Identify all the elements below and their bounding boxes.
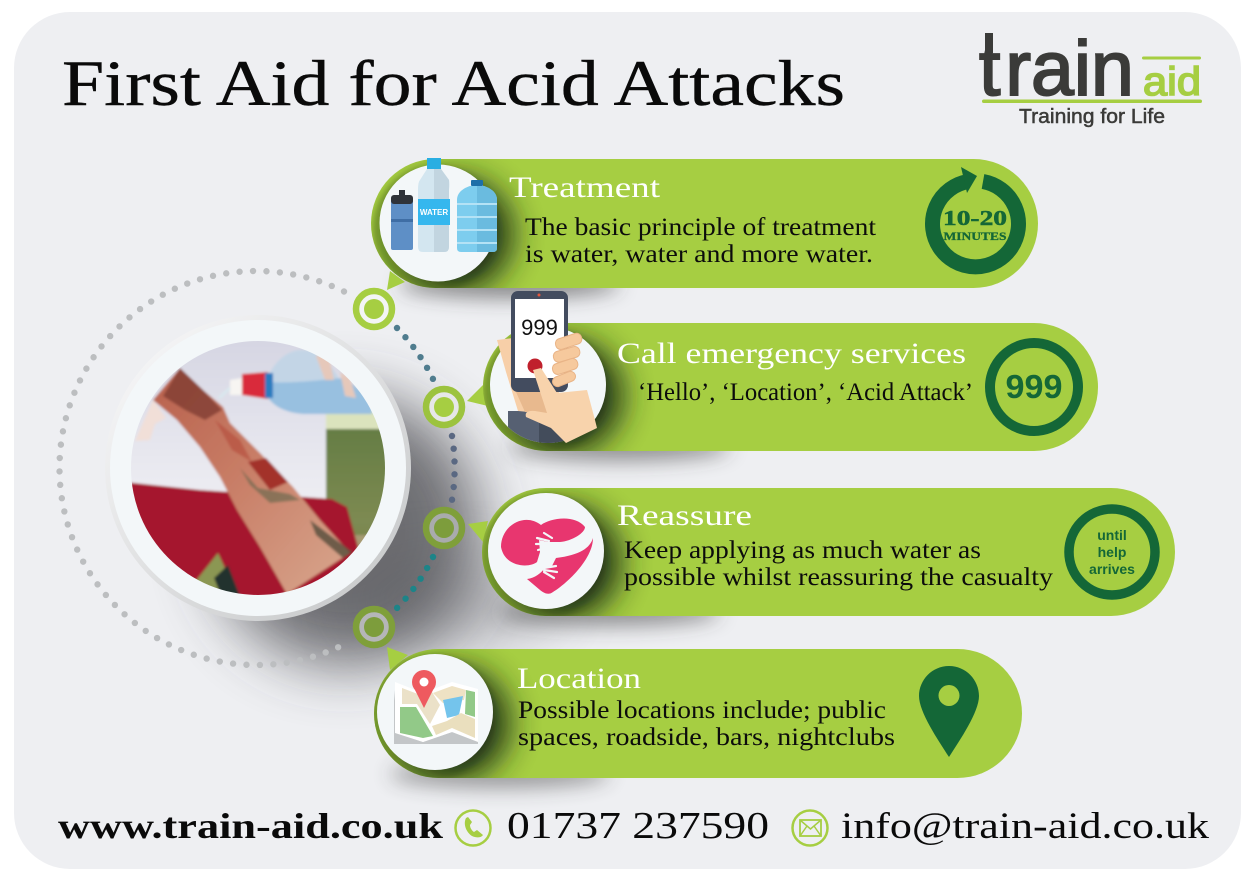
icon: hand holding phone dialling 999 xyxy=(497,291,597,445)
panel: call emergency services: ‘Hello’, ‘Location’, ‘Acid Attack’ xyxy=(638,379,973,406)
logo: train aid xyxy=(979,26,1202,128)
logo: train aid: Training for Life xyxy=(1019,106,1165,128)
footer: email: info@train-aid.co.uk xyxy=(841,806,1210,847)
dotted arc: grey xyxy=(59,271,344,665)
panel: reassure: Keep applying as much water as xyxy=(624,537,981,564)
panel: call emergency services: Call emergency services xyxy=(617,337,966,370)
icon: heart with hugging arms xyxy=(501,518,593,594)
panel: treatment xyxy=(371,158,1038,298)
icon: hand holding phone dialling 999: 999 xyxy=(521,315,558,340)
badge: until help arrives: until xyxy=(1097,527,1127,543)
panel: location: Location xyxy=(517,662,641,695)
panel: treatment: is water, water and more water. xyxy=(525,241,873,268)
node rings xyxy=(356,291,462,645)
dotted arc: teal xyxy=(397,557,433,608)
icon: email xyxy=(792,810,828,846)
footer: website: www.train-aid.co.uk xyxy=(58,806,443,846)
panel: location: Possible locations include; public xyxy=(518,697,886,724)
dotted arc: blue xyxy=(397,328,433,379)
badge: 10-20 minutes: MINUTES xyxy=(944,229,1007,243)
photo: arm being rinsed with water xyxy=(131,341,385,595)
badge: until help arrives: help xyxy=(1098,544,1126,560)
panel: reassure: possible whilst reassuring the casualty xyxy=(624,564,1054,591)
central circle shadow xyxy=(210,395,565,665)
panel: location: spaces, roadside, bars, nightclubs xyxy=(518,724,895,751)
panel: call emergency services xyxy=(467,291,1098,461)
badge: 10-20 minutes: 10-20 xyxy=(943,206,1007,230)
icon: water bottles xyxy=(391,158,497,252)
icon: location pin xyxy=(919,666,979,757)
badge: 999 xyxy=(990,343,1078,431)
central photo disc xyxy=(105,315,411,621)
badge: until help arrives: arrives xyxy=(1089,561,1135,577)
panel: reassure: Reassure xyxy=(617,499,752,532)
title: First Aid for Acid Attacks xyxy=(62,48,845,120)
badge: until help arrives xyxy=(1069,509,1155,595)
panel: location xyxy=(370,647,1022,788)
footer: phone number: 01737 237590 xyxy=(507,805,769,847)
panel: treatment: The basic principle of treatment xyxy=(525,214,876,241)
icon: phone xyxy=(456,810,490,846)
dotted arc: slate xyxy=(452,436,455,500)
logo: train aid: aid xyxy=(1143,60,1201,104)
panel: reassure xyxy=(468,488,1175,626)
badge: 999: 999 xyxy=(1006,368,1062,405)
logo: train aid: train xyxy=(979,26,1134,112)
panel: treatment: Treatment xyxy=(509,171,661,204)
badge: 10-20 minutes xyxy=(933,167,1018,267)
icon: water bottles: WATER xyxy=(420,208,448,217)
icon: folded map with pin xyxy=(394,670,478,744)
